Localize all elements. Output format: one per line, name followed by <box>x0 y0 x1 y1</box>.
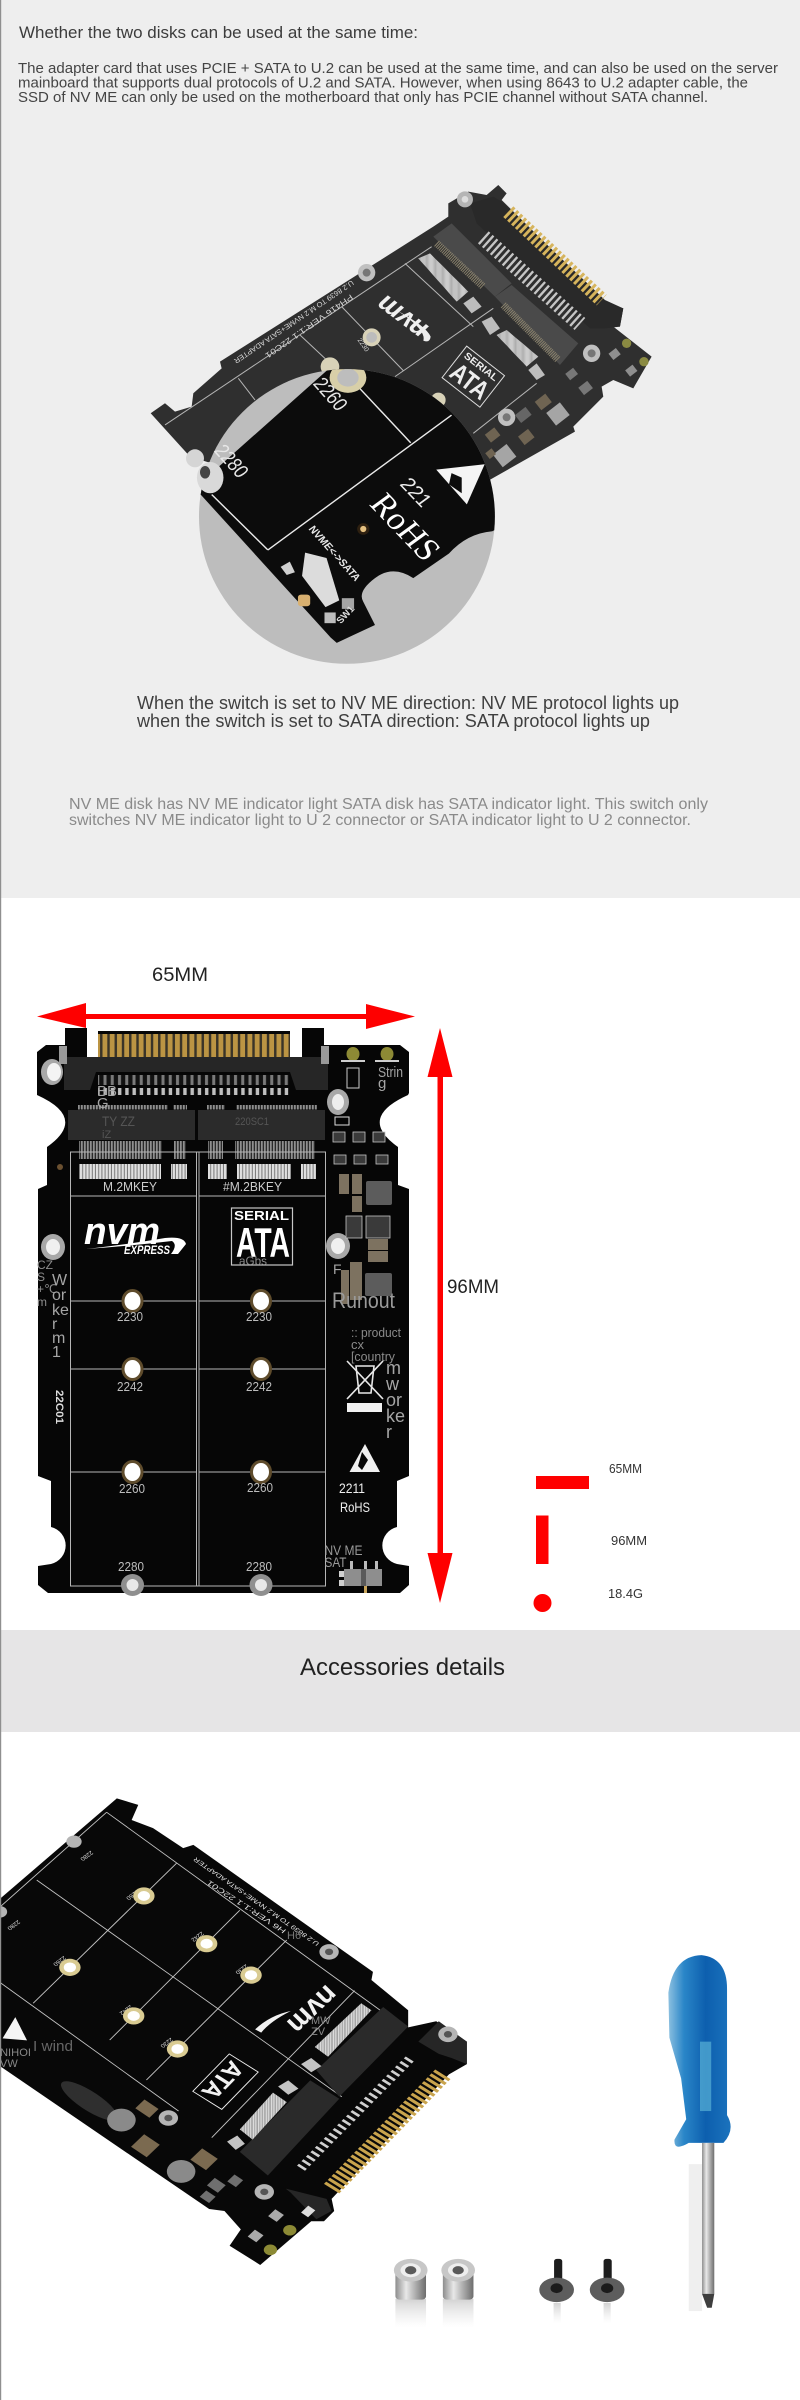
overlay stacked word <box>385 1358 405 1442</box>
slot faint labels: 220SC1 <box>235 1116 269 1128</box>
left edge stacked word: W <box>52 1272 68 1289</box>
screwdriver <box>668 1955 731 2311</box>
overlay stacked word: w <box>385 1374 400 1394</box>
Serial ATA logo: ATA <box>236 1219 290 1266</box>
text block: adapter explanation: The adapter card that uses PCIE + SATA to U.2 can be used at the same time, and can also be used on the server <box>18 61 778 77</box>
overlay product text <box>351 1325 401 1364</box>
small screws <box>539 2259 624 2323</box>
small connector pads <box>463 297 482 313</box>
nvm swoosh <box>397 311 431 341</box>
panel: disk usage explanation <box>0 0 800 898</box>
board grid lines <box>165 247 537 433</box>
adapter name silkscreen: U.2 8639 TO M.2 NVME+SATA ADAPTER <box>232 278 356 366</box>
slot faint labels: iZ <box>102 1129 111 1141</box>
silkscreen version: H6 VER:1.1 22C01 <box>205 1879 288 1935</box>
date code 221: 221 <box>395 474 436 511</box>
text block: indicator light note <box>69 796 708 829</box>
left edge stacked word: r <box>52 1316 58 1333</box>
slot faint labels <box>102 1113 269 1141</box>
connector latches <box>59 1046 67 1064</box>
switch labels: SAT <box>324 1554 347 1570</box>
icon: ESD warning <box>350 1444 380 1472</box>
top labels: G <box>97 1095 109 1112</box>
standoff holes <box>41 1059 350 1596</box>
photo: angled adapter board <box>151 185 652 513</box>
left edge overlay labels: S <box>37 1270 45 1284</box>
text block: switch direction <box>136 693 679 731</box>
Serial ATA logo: aGbs <box>239 1254 267 1268</box>
legend bar: width <box>536 1476 589 1489</box>
SATA logo: ATA <box>195 2056 250 2103</box>
overlay word Runout: Runout <box>332 1288 395 1313</box>
left edge rule <box>0 0 1 2400</box>
panel: accessories photo <box>0 1798 731 2327</box>
nvm express logo: EXPRESS <box>124 1243 170 1257</box>
text block: adapter explanation <box>18 61 778 106</box>
swoosh <box>255 2011 291 2033</box>
magnified grid lines <box>212 388 452 550</box>
connector body <box>286 2189 332 2219</box>
text block: switch direction: when the switch is set to SATA direction: SATA protocol lights up <box>136 711 650 731</box>
text block: adapter explanation: mainboard that supports dual protocols of U.2 and SATA. However, when using 8643 to U.2 adapter cable, the <box>18 76 748 92</box>
gold edge contacts <box>332 2074 443 2189</box>
magnifier circle <box>197 369 495 664</box>
magnifier circle: SW1 <box>334 604 358 626</box>
ESD triangle <box>3 2017 27 2040</box>
SATA logo: ATA <box>444 357 495 406</box>
M.2 B key label: #M.2BKEY <box>223 1179 282 1194</box>
M.2 slots <box>316 2007 408 2097</box>
overlay label: H6: H6 <box>287 1930 301 1942</box>
left edge overlay labels <box>37 1258 57 1309</box>
nvm express logo <box>84 1211 186 1257</box>
overlay label: VW: VW <box>0 2058 18 2070</box>
metal standoffs <box>394 2259 475 2327</box>
switch label: NVME<->SATA <box>306 524 363 584</box>
version silkscreen: PH416 VER:1.1 22C01 <box>263 292 355 360</box>
magnified black board <box>200 369 495 643</box>
slot length labels: 2230 <box>246 1309 272 1324</box>
top labels: Strin <box>378 1064 403 1081</box>
grid lines <box>0 1812 380 2138</box>
switch labels <box>324 1542 362 1570</box>
board outline <box>37 1028 409 1593</box>
2230 silkscreen: 2230 <box>356 337 370 354</box>
overlay product text: [country <box>351 1349 395 1364</box>
nvm express logo: nvm <box>84 1211 160 1253</box>
nvm logo: nvm <box>279 1981 347 2038</box>
slide switch <box>339 1561 382 1593</box>
heading: simultaneous use question: Whether the two disks can be used at the same time: <box>19 23 418 42</box>
arrow: width dimension <box>37 1003 415 1029</box>
connector body <box>470 197 623 328</box>
arrow: height dimension <box>428 1028 452 1603</box>
slot grid lines <box>70 1152 326 1586</box>
slot length labels <box>117 1309 273 1574</box>
slot length labels: 2280 <box>118 1559 144 1574</box>
board code 22C01: 22C01 <box>53 1390 65 1424</box>
RoHS label: RoHS <box>340 1499 370 1515</box>
gold edge contacts <box>98 1034 290 1057</box>
M.2 slots <box>68 1110 195 1140</box>
left edge overlay labels: +℃ <box>37 1282 57 1296</box>
heading: accessories details: Accessories details <box>300 1654 505 1681</box>
legend label: 65MM: 65MM <box>609 1462 642 1476</box>
ESD warning triangle <box>436 464 485 504</box>
slot length silkscreen: 2280 <box>5 1919 21 1931</box>
board at angle <box>0 1798 467 2265</box>
overlay product text: :: product <box>351 1325 401 1340</box>
slot length silkscreen: 2260 <box>51 1955 67 1967</box>
switch labels: NV ME <box>324 1542 362 1558</box>
label: 65MM width: 65MM <box>152 965 208 986</box>
gold connector pins <box>508 212 602 300</box>
silkscreen adapter name: U.2 8639 TO M.2 NVME+SATA ADAPTER <box>192 1855 321 1947</box>
inductors and components <box>107 2100 315 2255</box>
left edge stacked word: 1 <box>52 1344 61 1361</box>
overlay product text: cx <box>351 1337 364 1352</box>
panel: accessories heading band <box>0 1630 800 1732</box>
M.2 white combs <box>418 253 468 302</box>
top labels: g <box>378 1075 386 1092</box>
Serial ATA logo <box>232 1208 292 1268</box>
legend label: 96MM: 96MM <box>611 1534 647 1548</box>
slot contact strips <box>437 243 483 287</box>
text block: adapter explanation: SSD of NV ME can only be used on the motherboard that only has PCIE channel without SATA channel. <box>18 90 708 106</box>
left edge stacked word: or <box>52 1287 67 1304</box>
mounting holes <box>321 191 600 426</box>
slot length labels: 2260 <box>119 1481 145 1496</box>
label: 96MM height: 96MM <box>447 1277 499 1298</box>
slot length silkscreen: 2280 <box>78 1849 94 1862</box>
connector pins <box>98 1075 289 1085</box>
white combs <box>315 2003 371 2057</box>
left edge stacked word: ke <box>52 1302 69 1319</box>
M.2 M key label: M.2MKEY <box>103 1179 157 1194</box>
overlay label: NIHOI: NIHOI <box>0 2047 31 2059</box>
white comb contacts <box>79 1164 161 1179</box>
slot length labels: 2280 <box>246 1559 272 1574</box>
top labels: F <box>333 1261 342 1277</box>
overlay label: MW: MW <box>311 2015 331 2027</box>
panel: dimensions <box>37 965 647 1612</box>
slot faint labels: TY ZZ <box>102 1113 135 1129</box>
slot length silkscreen: 2260 <box>124 1888 140 1901</box>
magnified screw <box>197 462 223 493</box>
text block: indicator light note: NV ME disk has NV ME indicator light SATA disk has SATA indicator light. This switch only <box>69 796 708 813</box>
overlay label: I wind: I wind <box>33 2038 73 2055</box>
legend label: 18.4G: 18.4G <box>608 1587 643 1601</box>
slot length labels: 2260 <box>247 1480 273 1495</box>
M.2 slots <box>433 223 512 297</box>
SATA logo: SERIAL <box>461 351 500 384</box>
top labels: BB <box>97 1083 117 1100</box>
corner metal screw <box>186 449 204 467</box>
slot length labels: 2242 <box>117 1379 143 1394</box>
board body <box>151 185 652 513</box>
slot lower contacts <box>79 1141 162 1159</box>
power circuit components <box>333 1068 392 1304</box>
U.2 connector body <box>64 1057 328 1090</box>
connector pins <box>301 2058 411 2168</box>
text block: indicator light note: switches NV ME indicator light to U 2 connector or SATA indicator light to U 2 connector. <box>69 812 691 829</box>
legend dot: weight <box>534 1594 552 1612</box>
magnified 2280 label: 2280 <box>209 441 253 482</box>
left edge stacked word: m <box>52 1330 65 1347</box>
gold ring holes <box>59 1887 262 2058</box>
legend <box>534 1462 647 1612</box>
LEDs <box>341 1047 399 1062</box>
slot length labels: 2242 <box>246 1379 272 1394</box>
Serial ATA logo: SERIAL <box>234 1209 289 1223</box>
slot length labels: 2230 <box>117 1309 143 1324</box>
magnified mounting hole <box>330 369 366 393</box>
RoHS mark: RoHS <box>362 487 448 568</box>
left edge overlay labels: CZ <box>37 1258 53 1272</box>
icon: crossed bin <box>347 1361 383 1412</box>
magnified 2260 label: 2260 <box>308 374 352 415</box>
text block: switch direction: When the switch is set to NV ME direction: NV ME protocol lights up <box>137 693 679 713</box>
slot length silkscreen: 2242 <box>189 1930 204 1942</box>
surface mount components <box>485 339 649 467</box>
overlay label: ZV: ZV <box>311 2026 326 2038</box>
slot length silkscreen <box>5 1849 249 2048</box>
slot length silkscreen: 2230 <box>158 2036 174 2048</box>
top labels <box>97 1064 403 1277</box>
small pads <box>301 2058 321 2072</box>
overlay stacked word: ke <box>386 1406 405 1426</box>
slot upper contacts <box>78 1105 168 1110</box>
overlay stacked word: m <box>386 1358 401 1378</box>
legend bar: height <box>536 1516 548 1564</box>
photo: adapter board top view <box>37 1028 409 1596</box>
gold via <box>357 523 369 535</box>
date code 2211: 2211 <box>339 1480 365 1496</box>
nvm logo: nvm <box>370 289 433 347</box>
overlay stacked word: or <box>386 1390 402 1410</box>
slot length silkscreen: 2242 <box>117 2004 133 2016</box>
left edge overlay labels: m <box>37 1295 47 1309</box>
SATA logo <box>192 2054 258 2109</box>
metal mounting holes <box>0 1836 458 2200</box>
connector contact comb <box>483 237 580 324</box>
overlay stacked word: r <box>386 1422 392 1442</box>
mode slide switch <box>302 553 339 607</box>
left edge stacked word <box>52 1272 69 1361</box>
smudge <box>55 2076 124 2126</box>
slot length silkscreen: 2230 <box>233 1963 249 1975</box>
